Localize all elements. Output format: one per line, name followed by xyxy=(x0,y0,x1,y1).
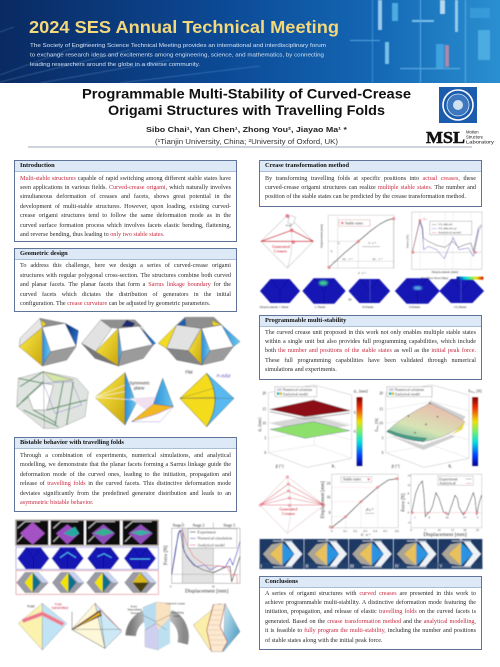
force chart: 14 xyxy=(408,474,411,478)
experiment photos: I xyxy=(261,564,263,569)
experiment photos: III xyxy=(350,564,355,569)
curved elbow diagram: Curved corner xyxy=(166,601,186,605)
force chart: Force [N] xyxy=(402,493,407,512)
force chart: Displacement [mm] xyxy=(423,533,467,538)
text: geometric design body: structures with regular polygonal cross-section. The structures combine both curved xyxy=(20,273,231,279)
curved elbow diagram: Fold xyxy=(131,604,137,608)
banner heading: 2024 SES Annual Technical Meeting xyxy=(29,17,339,37)
3D plot of peak force: 5 xyxy=(382,436,384,440)
heading: bistable behavior xyxy=(15,438,236,449)
heading: programmable multi-stability: Programmable multi-stability xyxy=(265,317,346,324)
displacement chart: 0.3 xyxy=(363,529,368,533)
force displacement chart: Stage 3 xyxy=(223,522,235,527)
force chart: IV xyxy=(463,515,467,519)
displacement chart: 24 xyxy=(327,481,330,485)
text: introduction body: crease origami structures tend to follow the same deformation mode as in the xyxy=(20,213,231,219)
flat pattern: f²=h/δd xyxy=(217,373,231,378)
text: geometric design body: curved facets which dictates the distribution of generators in the initial xyxy=(20,292,231,298)
3D plot of crease displacement: 5 xyxy=(264,436,266,440)
displacement chart: θ · a⁻¹ xyxy=(368,241,376,245)
curved elbow diagram: folds xyxy=(173,614,181,618)
text: programmable body: These full programming capabilities have been validated through numerical xyxy=(265,358,476,364)
laboratory logo: MSL xyxy=(426,128,465,147)
force chart: II xyxy=(428,515,430,519)
text: bistable behavior body: modelling, we demonstrate that the planar facets forming a Sarrus linkage guide the xyxy=(20,462,231,468)
force chart: Displacement [mm] xyxy=(432,270,458,274)
3D plot of crease displacement: 0 xyxy=(264,451,266,455)
banner description xyxy=(30,43,326,68)
text: crease transformation body: position of the stable states can be predicted by the crease transformation method. xyxy=(265,194,466,200)
text: conclusions body: it is feasible to fully program the multi-stability, including the number and positions xyxy=(265,628,476,634)
text: crease transformation body: curved-crease origami structures can realize multiple stable states. The number and xyxy=(265,185,476,191)
text: conclusions body: achieve programmable multi-stability. A distinctive deformation mode featuring the xyxy=(265,600,476,606)
3D plot of crease displacement: β [°] xyxy=(276,463,284,468)
text: geometric design body xyxy=(20,262,231,307)
poster title: Programmable Multi-Stability of Curved-Crease xyxy=(82,86,411,102)
text: introduction body: seen applications in various fields. Curved-crease origami, which naturally involves xyxy=(20,185,231,191)
force displacement chart xyxy=(164,522,240,594)
affiliations: (¹Tianjin University, China; ²University of Oxford, UK) xyxy=(155,139,338,146)
force chart: F₀ₜ xyxy=(423,217,427,221)
3D plot of peak force: Fₘₐₓ [N] xyxy=(374,418,379,432)
text: programmable body: within a single unit but also provides full programming capabilities, which include xyxy=(265,339,476,345)
force chart: I xyxy=(414,515,415,519)
text: programmable body: both the number and positions of the stable states as well as the initial peak force. xyxy=(265,348,476,354)
force chart: VS-J86-#3 xyxy=(438,223,453,227)
3D plot of crease displacement: 15 xyxy=(262,408,266,412)
generated crease diagram: Creases xyxy=(274,248,287,253)
authors: Sibo Chai¹, Yan Chen¹, Zhong You², Jiayao Ma¹ * xyxy=(146,125,347,134)
text: introduction body: simultaneous deformation of creases and facets, shows great potential in the xyxy=(20,194,231,200)
folded state one xyxy=(19,318,78,366)
laboratory logo: Structure xyxy=(466,134,484,140)
force displacement chart: Displacement [mm] xyxy=(185,589,229,594)
travelling fold diagram: transmitted xyxy=(52,606,68,610)
generated crease diagram: Fold xyxy=(286,224,292,228)
displacement chart: Displacement [mm] xyxy=(321,481,326,518)
3D plot of crease displacement: 10 xyxy=(262,422,266,426)
force displacement chart: Stage 2 xyxy=(193,522,205,527)
folded unit with symmetry plane: plane xyxy=(134,385,145,390)
panel: conclusions xyxy=(259,576,482,650)
header banner xyxy=(0,0,500,83)
force chart: Experiment xyxy=(439,476,458,481)
heading: geometric design xyxy=(15,249,236,260)
3D plot of crease displacement: d₂ xyxy=(354,410,357,414)
displacement chart: 8 xyxy=(329,511,331,515)
3D plot of crease displacement xyxy=(257,385,368,468)
force chart: VS-J86-#3-a2 xyxy=(438,227,457,231)
force chart: 25 xyxy=(476,528,479,532)
3D plot of crease displacement: Numerical solutions xyxy=(283,388,313,392)
kinematic wedge diagram xyxy=(72,603,122,648)
text: conclusions body: generated. Based on the crease transformation method and the analytical modelling, xyxy=(265,619,476,625)
force chart: 0 xyxy=(408,510,410,514)
panel: geometric design xyxy=(14,248,237,312)
heading: conclusions: Conclusions xyxy=(265,578,298,585)
fold strip diagram xyxy=(193,603,240,652)
heading: introduction xyxy=(15,161,236,172)
stress contour sequence: Von Mises Stress [Mpa] xyxy=(421,276,448,280)
displacement chart: 0.1 xyxy=(343,529,348,533)
displacement chart: 16 xyxy=(327,496,330,500)
force chart: III xyxy=(446,515,449,519)
text: bistable behavior body: Through a combination of experiments, numerical simulations, and analytical xyxy=(20,453,231,459)
force chart: 15 xyxy=(451,528,454,532)
force chart: 5 xyxy=(424,528,426,532)
text: programmable body: The curved crease unit proposed in this work not only enables multiple stable states xyxy=(265,330,476,336)
curved elbow diagram xyxy=(127,601,186,650)
text: introduction body: and reverse bending, thus leading to only two stable states. xyxy=(20,232,164,238)
displacement chart: d · a⁻¹ xyxy=(361,533,371,537)
displacement chart: 0.6 xyxy=(395,529,399,533)
figure: experiment and simulation comparison xyxy=(16,520,240,652)
text: bistable behavior body: release of travelling folds in the curved facets. This distinctive deformation mode xyxy=(20,481,231,487)
force displacement chart: Experiment xyxy=(197,529,217,534)
folded unit with symmetry plane: Symmetric xyxy=(129,381,151,386)
3D plot of peak force: β [°] xyxy=(392,463,400,468)
text: crease transformation body xyxy=(265,176,476,200)
3D plot of peak force: Rᵢ xyxy=(448,463,452,468)
displacement chart: 0.2 xyxy=(353,529,358,533)
text: conclusions body: A series of origami structures with curved creases are presented in this work to xyxy=(265,591,476,597)
force chart: V xyxy=(477,515,480,519)
banner description: The Society of Engineering Science Technical Meeting provides an international and interdisciplinary forum xyxy=(30,43,326,49)
heading: geometric design: Geometric design xyxy=(20,250,68,257)
force displacement chart: 0 xyxy=(170,585,172,589)
3D plot of crease displacement: Analytical model xyxy=(283,392,308,396)
text: programmable body xyxy=(265,330,476,373)
heading: crease transformation method: Crease transformation method xyxy=(265,162,349,169)
curved elbow diagram: Status xyxy=(131,611,140,615)
force displacement chart: Numerical simulation xyxy=(197,536,232,541)
folded unit with symmetry plane xyxy=(95,373,173,425)
text: bistable behavior body: deformation mode of the curved ones, leading to the initiation, propagation and xyxy=(20,472,231,478)
panel: introduction xyxy=(14,160,237,242)
panel: crease transformation method xyxy=(259,160,482,207)
multi crease diagram: Creases xyxy=(282,511,295,516)
force displacement chart: Force [N] xyxy=(164,545,169,565)
3D plot of peak force: Analytical model xyxy=(395,392,420,396)
3D plot of peak force: 10 xyxy=(379,422,383,426)
banner description: leading researchers around the globe in a diverse community. xyxy=(30,62,200,68)
text: conclusions body: initiation, propagation, and release of elastic travelling folds on the curved facets is xyxy=(265,609,476,615)
stress contour sequence: Displacement = 0mm xyxy=(260,305,289,309)
curved elbow diagram: Travelling xyxy=(170,611,184,615)
displacement chart: δd₂ · a⁻¹ xyxy=(372,257,383,261)
figure: crease transformation method xyxy=(260,212,484,309)
travelling fold diagram: Fold xyxy=(55,603,62,607)
force displacement chart: Stage 1 xyxy=(173,522,185,527)
text: bistable behavior body: asymmetric bistable behavior. xyxy=(20,500,94,506)
displacement chart: δd₁ · a⁻¹ xyxy=(342,257,353,261)
3D plot of crease displacement: Rᵢ xyxy=(332,463,335,468)
3D plot of peak force: 15 xyxy=(379,408,383,412)
folded state three xyxy=(158,317,240,365)
heading: crease transformation method xyxy=(260,161,481,172)
text: geometric design body: To address this challenge, here we design a series of curved-crease origami xyxy=(20,263,231,269)
text: conclusions body: of stable states along with the initial peak force. xyxy=(265,638,382,644)
travelling fold diagram xyxy=(18,603,68,650)
multi crease diagram xyxy=(259,476,325,533)
experiment photos xyxy=(260,539,482,569)
text: crease transformation body: By transforming travelling folds at specific positions into actual creases, these xyxy=(265,176,476,182)
heading: programmable multi-stability xyxy=(260,316,481,327)
generated crease diagram xyxy=(261,215,313,268)
3D plot of peak force: 20 xyxy=(379,391,383,395)
force chart: 0 xyxy=(410,528,412,532)
text: conclusions body xyxy=(265,590,476,644)
banner description: to exchange research ideas and excitements among engineering, science, and mathematics, by connecting xyxy=(30,52,324,58)
stress contour sequence: II xyxy=(303,297,306,301)
experiment photos: II xyxy=(306,564,309,569)
text: introduction body: development of multi-stable structures. However, upon loading, existing curved- xyxy=(20,204,231,210)
panel: programmable multi-stability xyxy=(259,315,482,380)
text: programmable body: simulations and experiments. xyxy=(265,367,337,373)
stress contour sequence: I xyxy=(260,297,261,301)
heading: bistable behavior: Bistable behavior with travelling folds xyxy=(20,439,124,446)
flat pattern: Flat xyxy=(185,369,193,374)
displacement chart xyxy=(321,474,399,537)
stress contour sequence: 14.29mm xyxy=(454,305,467,309)
3D plot of peak force xyxy=(374,385,482,468)
experiment frames xyxy=(16,520,158,546)
force chart: 4 xyxy=(408,501,410,505)
wireframe geometry model xyxy=(17,372,88,428)
displacement chart: 0.4 xyxy=(373,529,378,533)
force chart: 8 xyxy=(408,491,410,495)
poster title xyxy=(82,86,411,118)
poster title: Origami Structures with Travelling Folds xyxy=(108,103,385,118)
stress contour sequence: 9.83mm xyxy=(409,305,420,309)
stress contour sequence: IV xyxy=(393,298,397,302)
curved elbow diagram: Smoothing xyxy=(127,608,142,612)
force displacement chart: Analytical model xyxy=(197,542,226,547)
text: introduction body: curved surface formation process which involves facets elastic bending, flattening, xyxy=(20,223,231,229)
icon: university seal xyxy=(439,87,477,123)
panel: bistable behavior xyxy=(14,437,237,512)
displacement chart: Displacement [mm] xyxy=(319,224,323,248)
flat pattern xyxy=(180,369,234,427)
stress contour sequence: 1.79mm xyxy=(314,305,326,309)
3D plot of peak force: 0 xyxy=(382,451,384,455)
heading: conclusions xyxy=(260,577,481,588)
force chart: 10 xyxy=(438,528,441,532)
3D plot of crease displacement: d꜀ᵣ [mm] xyxy=(257,417,262,432)
displacement chart: Stable states xyxy=(343,478,362,482)
text: bistable behavior body xyxy=(20,452,231,506)
analytical model frames xyxy=(16,571,158,594)
3D plot of crease displacement: d₁ xyxy=(354,430,357,434)
figure: programmable multi-stability xyxy=(257,385,482,569)
displacement chart: 0.5 xyxy=(383,529,388,533)
displacement chart: 𝛿·a⁻¹ xyxy=(366,507,374,512)
displacement chart: 0 xyxy=(329,526,331,530)
generated crease diagram: Generated xyxy=(272,244,291,249)
folded state two xyxy=(82,320,156,366)
force chart: Analytical xyxy=(439,481,456,486)
3D plot of peak force: Numerical solutions xyxy=(395,388,425,392)
experiment photos: IV xyxy=(395,564,399,569)
3D plot of peak force: Fₘₐₓ [N] xyxy=(468,388,482,393)
displacement chart: d₁ xyxy=(330,249,333,253)
text: introduction body xyxy=(20,176,231,238)
multi crease diagram: Generated xyxy=(279,507,298,512)
laboratory logo xyxy=(426,128,495,147)
text: geometric design body: configuration. The crease curvature can be adjusted by geometric parameters. xyxy=(20,301,210,307)
stress contour sequence: V xyxy=(441,298,444,302)
stress contour sequence xyxy=(260,276,484,309)
stress contour sequence: 8.03mm xyxy=(362,305,374,309)
displacement chart: 0 xyxy=(331,529,333,533)
travelling fold diagram: Fold xyxy=(27,605,34,609)
text: bistable behavior body: deviates significantly from the predefined generator distribution and leads to an xyxy=(20,491,231,497)
force chart xyxy=(402,474,482,538)
force chart: 20 xyxy=(463,528,467,532)
laboratory logo: Laboratory xyxy=(466,140,495,144)
stress contour sequence: III xyxy=(348,298,352,302)
displacement chart: d₂ xyxy=(338,241,340,245)
figure: origami geometry xyxy=(17,317,240,428)
force chart: Force [N] xyxy=(405,235,409,248)
text: geometric design body: and planar facets. The planar facets that form a Sarrus linkage boundary for the xyxy=(20,282,231,288)
force chart: Analytical model xyxy=(438,231,461,235)
force chart: 12 xyxy=(408,483,411,487)
displacement chart xyxy=(319,215,395,275)
force chart xyxy=(405,212,482,274)
simulation frames xyxy=(16,547,158,569)
experiment photos: V xyxy=(440,564,443,569)
laboratory logo: Motion xyxy=(466,130,479,134)
displacement chart: d · a⁻¹ xyxy=(358,271,366,275)
heading: introduction: Introduction xyxy=(20,162,55,169)
force displacement chart: 10 xyxy=(212,585,215,589)
text: introduction body: Multi-stable structures capable of rapid switching among different stable states have xyxy=(20,176,231,182)
3D plot of crease displacement: 20 xyxy=(262,391,266,395)
3D plot of crease displacement: d꜀ᵣ [mm] xyxy=(354,388,368,393)
displacement chart: Stable states xyxy=(345,221,364,225)
force chart: -4 xyxy=(408,520,411,524)
